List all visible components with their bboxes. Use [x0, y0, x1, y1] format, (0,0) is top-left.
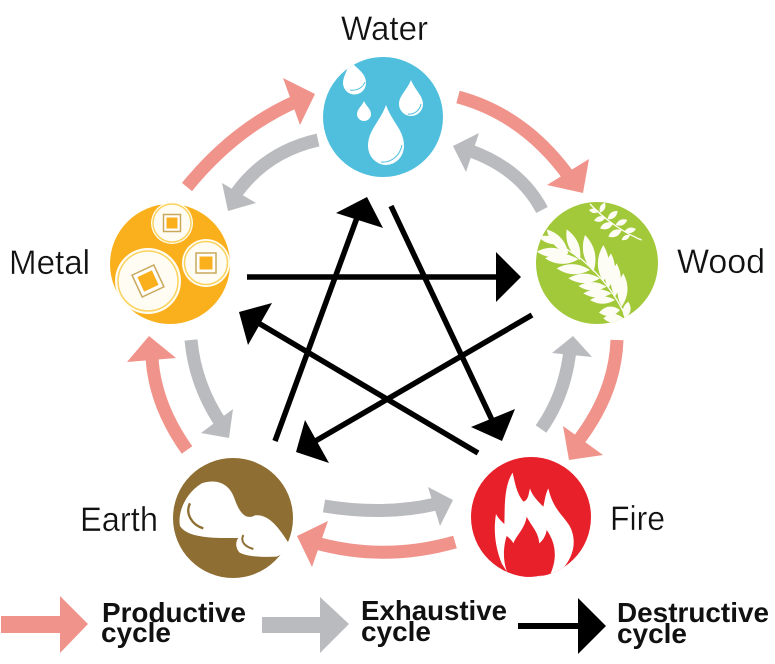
icon: water circle with drops — [323, 57, 443, 177]
legend: exhaustive text: Exhaustive — [361, 595, 507, 626]
destructive arrow: earth to water — [275, 197, 383, 441]
destructive arrow: fire to metal — [239, 303, 478, 453]
productive arrow: fire to earth — [297, 521, 455, 567]
legend: destructive text: cycle — [617, 618, 687, 649]
legend: destructive arrow — [518, 598, 606, 654]
exhaustive arrow: fire to wood — [541, 336, 592, 429]
legend: productive text — [101, 597, 246, 648]
label: Metal: Metal — [9, 244, 90, 282]
exhaustive arrow: metal to earth — [191, 340, 233, 438]
label: Fire: Fire — [610, 500, 665, 538]
icon: wood circle with fronds — [536, 202, 658, 324]
legend: productive text: Productive — [102, 597, 246, 628]
exhaustive arrow: earth to fire — [324, 487, 453, 526]
legend: destructive text — [617, 597, 769, 649]
legend: productive arrow — [1, 596, 88, 653]
label: Wood: Wood — [677, 243, 765, 281]
icon: earth circle with rocks — [173, 458, 293, 578]
label: Water: Water — [341, 10, 428, 48]
legend: destructive text: Destructive — [617, 597, 769, 628]
legend: exhaustive text — [361, 595, 507, 647]
destructive arrow: metal to wood — [247, 252, 521, 302]
exhaustive arrow: wood to water — [453, 133, 542, 210]
icon: fire circle with flame — [471, 457, 591, 578]
exhaustive arrow: water to metal — [222, 140, 318, 211]
label: Earth: Earth — [80, 501, 158, 539]
legend: exhaustive arrow — [262, 597, 349, 653]
destructive arrow: water to fire — [391, 206, 515, 441]
legend: exhaustive text: cycle — [361, 616, 431, 647]
productive arrow: metal to water — [187, 78, 315, 187]
productive arrow: water to wood — [458, 97, 589, 193]
destructive arrow: wood to earth — [296, 315, 532, 463]
legend: productive text: cycle — [101, 617, 171, 648]
icon: metal circle with coins — [110, 202, 230, 324]
productive arrow: wood to fire — [563, 340, 617, 460]
productive arrow: earth to metal — [127, 336, 187, 450]
